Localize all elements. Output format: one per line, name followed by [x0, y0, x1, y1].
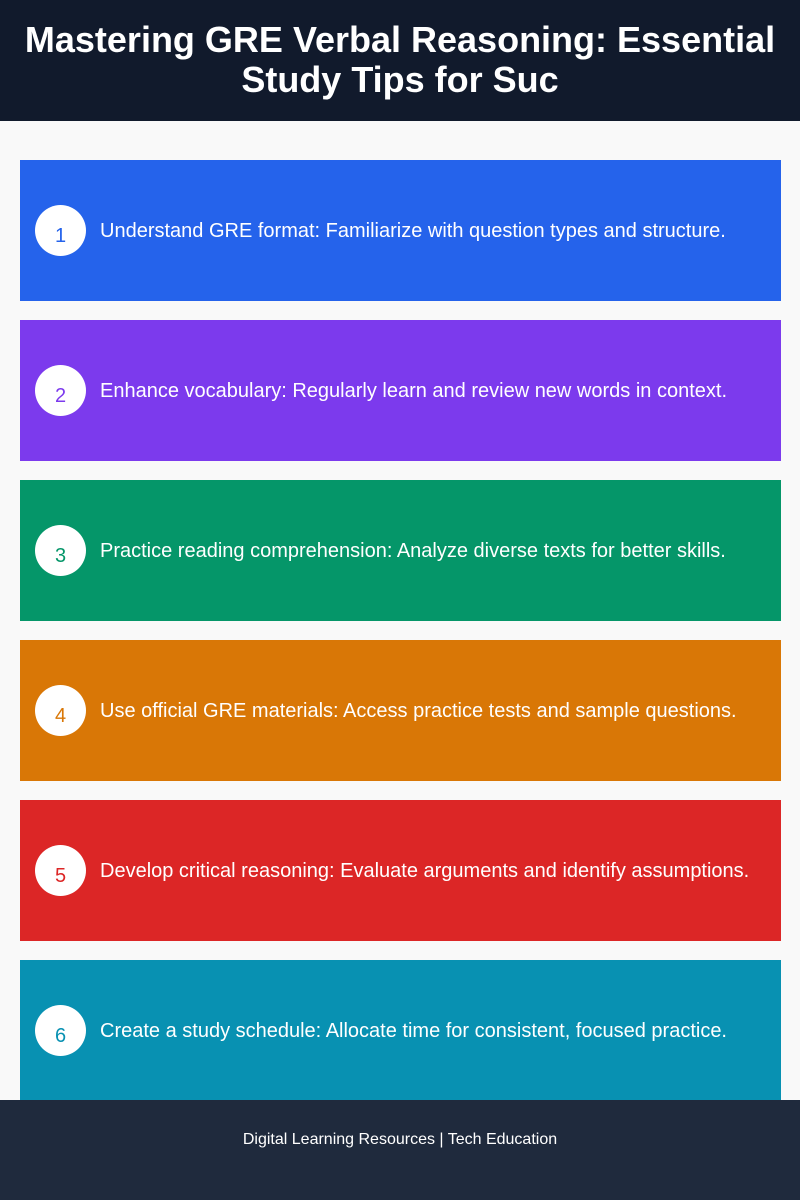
- title: Mastering GRE Verbal Reasoning: Essential: [25, 19, 775, 60]
- card 3: Practice reading comprehension: Analyze diverse texts for better skills.: [100, 540, 726, 562]
- title: Study Tips for Suc: [241, 59, 559, 100]
- title: [0, 0, 800, 121]
- card 2: [20, 320, 781, 461]
- card 5: [20, 800, 781, 941]
- footer: Digital Learning Resources | Tech Education: [243, 1131, 557, 1148]
- card 5: Develop critical reasoning: Evaluate arguments and identify assumptions.: [100, 860, 749, 882]
- card 6: Create a study schedule: Allocate time for consistent, focused practice.: [100, 1020, 727, 1042]
- card 4: 4: [55, 705, 66, 727]
- card 3: 3: [55, 545, 66, 567]
- card 4: [20, 640, 781, 781]
- card 6: 6: [55, 1025, 66, 1047]
- card 1: [20, 160, 781, 301]
- card 1: Understand GRE format: Familiarize with question types and structure.: [100, 220, 726, 242]
- card 2: Enhance vocabulary: Regularly learn and review new words in context.: [100, 380, 727, 402]
- card 3: [20, 480, 781, 621]
- card 2: 2: [55, 385, 66, 407]
- card 6: [20, 960, 781, 1101]
- card 5: 5: [55, 865, 66, 887]
- footer: [0, 1100, 800, 1200]
- card 4: Use official GRE materials: Access practice tests and sample questions.: [100, 700, 737, 722]
- card 1: 1: [55, 225, 66, 247]
